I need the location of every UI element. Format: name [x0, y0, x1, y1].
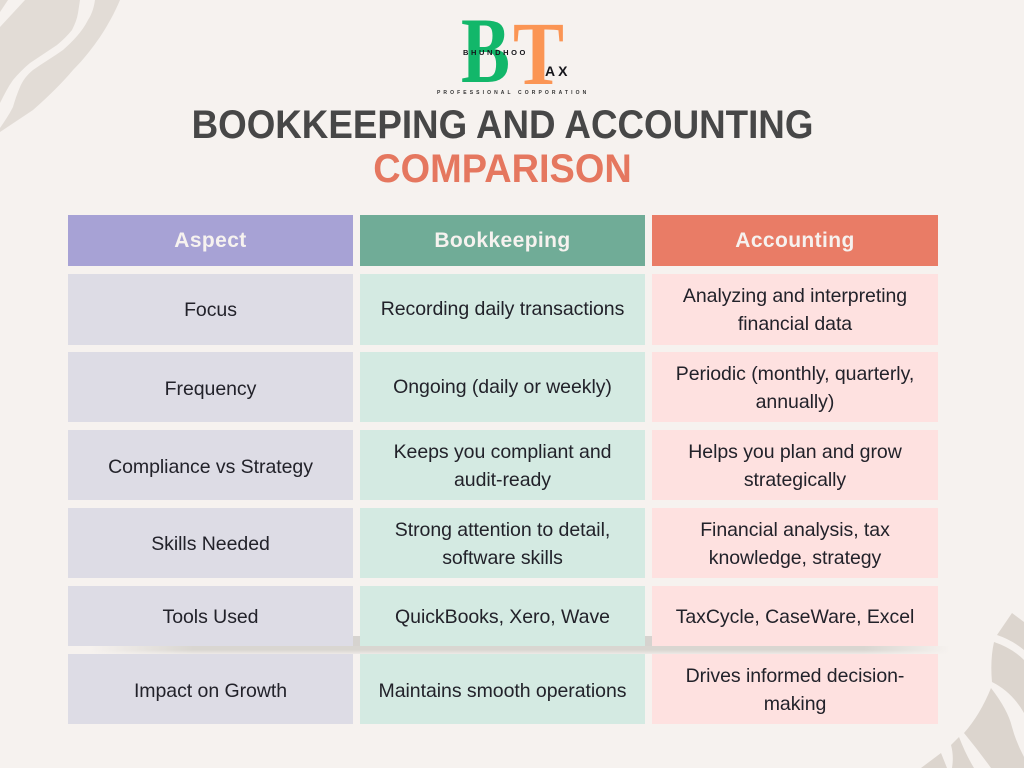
row 4 accounting: knowledge, strategy [709, 547, 881, 569]
row 1 aspect [68, 274, 353, 345]
row 2 aspect: Frequency [165, 378, 256, 400]
row 5 aspect: Tools Used [163, 606, 258, 628]
row 5 bookkeeping [360, 586, 645, 646]
row 1 bookkeeping [360, 274, 645, 345]
row 4 accounting: Financial analysis, tax [700, 519, 890, 541]
table shadow band [90, 646, 950, 654]
decoration: bottom-right leaf [921, 613, 1024, 768]
row 5 accounting [652, 586, 938, 646]
header: Aspect [68, 215, 353, 266]
row 3 accounting: Helps you plan and grow [688, 441, 902, 463]
logo letter T: T [513, 5, 564, 104]
row 5 bookkeeping: QuickBooks, Xero, Wave [395, 606, 610, 628]
row 4 aspect: Skills Needed [151, 533, 270, 555]
row 6 aspect [68, 654, 353, 724]
row 2 bookkeeping [360, 352, 645, 422]
gap shadow left [353, 636, 360, 646]
row 6 accounting: making [764, 693, 826, 715]
row 1 accounting: Analyzing and interpreting [683, 284, 907, 306]
row 2 accounting: Periodic (monthly, quarterly, [676, 363, 914, 385]
header: Aspect: Aspect [174, 228, 247, 252]
logo letter B: B [461, 0, 510, 103]
row 4 bookkeeping: Strong attention to detail, [395, 519, 610, 541]
row 3 bookkeeping: Keeps you compliant and [394, 441, 611, 463]
row 3 accounting [652, 430, 938, 500]
row 3 aspect [68, 430, 353, 500]
row 3 aspect: Compliance vs Strategy [108, 456, 313, 478]
logo [437, 0, 589, 104]
logo tagline: PROFESSIONAL CORPORATION [437, 90, 589, 96]
row 4 aspect [68, 508, 353, 578]
row 6 bookkeeping [360, 654, 645, 724]
row 6 aspect: Impact on Growth [134, 680, 287, 702]
row 4 bookkeeping: software skills [442, 547, 563, 569]
row 6 bookkeeping: Maintains smooth operations [379, 680, 626, 702]
title line 1: BOOKKEEPING AND ACCOUNTING [192, 103, 813, 147]
row 2 accounting: annually) [756, 391, 834, 413]
header: Accounting [652, 215, 938, 266]
header: Bookkeeping: Bookkeeping [434, 228, 571, 252]
row 1 accounting [652, 274, 938, 345]
decoration: top-left leaf [0, 0, 120, 132]
row 6 accounting: Drives informed decision- [686, 665, 904, 687]
row 2 bookkeeping: Ongoing (daily or weekly) [393, 376, 612, 398]
header: Bookkeeping [360, 215, 645, 266]
header: Accounting: Accounting [735, 228, 855, 252]
row 1 accounting: financial data [738, 312, 852, 334]
row 3 accounting: strategically [744, 469, 846, 491]
row 2 aspect [68, 352, 353, 422]
row 6 accounting [652, 654, 938, 724]
row 1 aspect: Focus [184, 298, 237, 320]
row 5 accounting: TaxCycle, CaseWare, Excel [676, 606, 914, 628]
row 3 bookkeeping [360, 430, 645, 500]
title line 2: COMPARISON [373, 147, 632, 191]
row 4 bookkeeping [360, 508, 645, 578]
gap shadow right [645, 636, 652, 646]
row 5 aspect [68, 586, 353, 646]
row 4 accounting [652, 508, 938, 578]
logo word BHUNDHOO: BHUNDHOO [463, 48, 528, 57]
row 1 bookkeeping: Recording daily transactions [381, 298, 624, 320]
row 3 bookkeeping: audit-ready [454, 469, 551, 491]
row 2 accounting [652, 352, 938, 422]
logo word AX: AX [545, 63, 570, 79]
